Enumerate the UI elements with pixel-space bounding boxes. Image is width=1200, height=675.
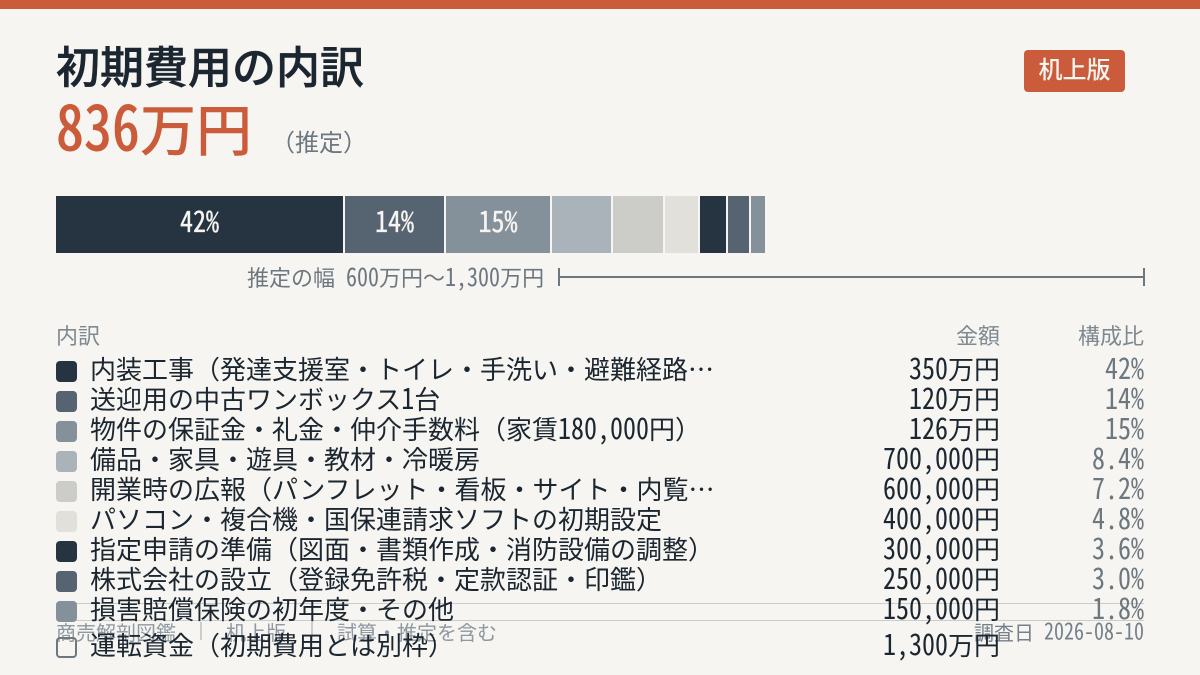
row 8: 円 (974, 560, 1000, 597)
divider line lower (56, 620, 1144, 621)
footer date (974, 614, 1144, 647)
segment 1.8% (751, 196, 765, 253)
row 7: 円 (974, 530, 1000, 567)
badge (1024, 50, 1125, 92)
row 2: 120 (909, 376, 948, 418)
stacked bar (56, 196, 765, 253)
row 7: 300,000 (883, 526, 974, 568)
row 3: 15% (1105, 406, 1144, 448)
row 2: 1 (401, 376, 414, 418)
segment 4.8% (665, 196, 698, 253)
row 5 (56, 466, 1144, 508)
row 9: 1.8% (1092, 586, 1144, 628)
row 1: 42% (1105, 346, 1144, 388)
row 3: 126 (909, 406, 948, 448)
row 5: 600,000 (883, 466, 974, 508)
row 4: 円 (974, 440, 1000, 477)
row 3: 180,000 (558, 406, 649, 448)
row 4: 備品・家具・遊具・教材・冷暖房 (90, 440, 480, 477)
row 10: working capital: 万円 (948, 626, 1000, 663)
range bracket (558, 268, 1145, 286)
segment 3.6% (700, 196, 726, 253)
row 1 (56, 346, 1144, 388)
badge: 机上版 (1038, 50, 1110, 85)
row 4 (56, 436, 1144, 478)
row 4: 8.4% (1092, 436, 1144, 478)
footer date: 2026-08-10 (1044, 614, 1144, 647)
row 10: working capital (56, 622, 1000, 664)
row 9: 円 (974, 590, 1000, 627)
table header: share: 構成比 (1078, 319, 1144, 351)
total amount: 万円 (140, 87, 252, 168)
row 5: 7.2% (1092, 466, 1144, 508)
row 7: 指定申請の準備（図面・書類作成・消防設備の調整） (90, 530, 714, 567)
segment 15%: 15% (478, 199, 518, 241)
total amount: 836 (56, 77, 140, 170)
divider line upper (56, 603, 1144, 604)
footer date: 調査日 (974, 617, 1034, 646)
row 8: 3.0% (1092, 556, 1144, 598)
segment 14%: 14% (375, 199, 414, 241)
row 8: 株式会社の設立（登録免許税・定款認証・印鑑） (90, 560, 662, 597)
row 1: 350 (909, 346, 948, 388)
row 2 (56, 376, 1144, 418)
top accent bar (0, 0, 1200, 9)
range label: 600 (346, 257, 379, 294)
row 5: 開業時の広報（パンフレット・看板・サイト・内覧… (90, 470, 715, 507)
row 9: 損害賠償保険の初年度・その他 (90, 590, 454, 627)
segment 42%: 42% (180, 199, 219, 241)
row 3: 物件の保証金・礼金・仲介手数料（家賃 円） (90, 410, 701, 447)
row 5: 円 (974, 470, 1000, 507)
row 9: 150,000 (883, 586, 974, 628)
segment 3.0% (728, 196, 749, 253)
row 1: 万円 (948, 350, 1000, 387)
row 8 (56, 556, 1144, 598)
footer left: 机上版 (226, 617, 286, 646)
row 2: 万円 (948, 380, 1000, 417)
row 8: 250,000 (883, 556, 974, 598)
row 2: 送迎用の中古ワンボックス 台 (90, 380, 440, 417)
row 7: 3.6% (1092, 526, 1144, 568)
row 6 (56, 496, 1144, 538)
title: 初期費用の内訳 (56, 32, 364, 96)
footer left (56, 617, 497, 646)
row 9 (56, 586, 1144, 628)
row 6: 4.8% (1092, 496, 1144, 538)
row 4: 700,000 (883, 436, 974, 478)
table header: item: 内訳 (56, 319, 100, 351)
table header: amount: 金額 (956, 319, 1000, 351)
range label: 1,300 (445, 257, 500, 294)
footer left: 商売解剖図鑑 (56, 617, 176, 646)
row 6: 円 (974, 500, 1000, 537)
row 6: パソコン・複合機・国保連請求ソフトの初期設定 (90, 500, 662, 537)
row 6: 400,000 (883, 496, 974, 538)
segment 8.4% (552, 196, 611, 253)
segment 7.2% (613, 196, 663, 253)
footer left: 試算・推定を含む (337, 617, 497, 646)
total amount (56, 77, 252, 170)
row 10: working capital: 運転資金（初期費用とは別枠） (90, 626, 454, 663)
row 2: 14% (1105, 376, 1144, 418)
row 3 (56, 406, 1144, 448)
row 7 (56, 526, 1144, 568)
segment 14% (345, 196, 444, 253)
row 1: 内装工事（発達支援室・トイレ・手洗い・避難経路… (90, 350, 714, 387)
row 10: working capital: 1,300 (883, 622, 948, 664)
estimate note: （推定） (271, 123, 367, 158)
segment 15% (446, 196, 550, 253)
range label: 推定の幅 万円～ 万円 (247, 261, 544, 293)
row 3: 万円 (948, 410, 1000, 447)
segment 42% (56, 196, 343, 253)
